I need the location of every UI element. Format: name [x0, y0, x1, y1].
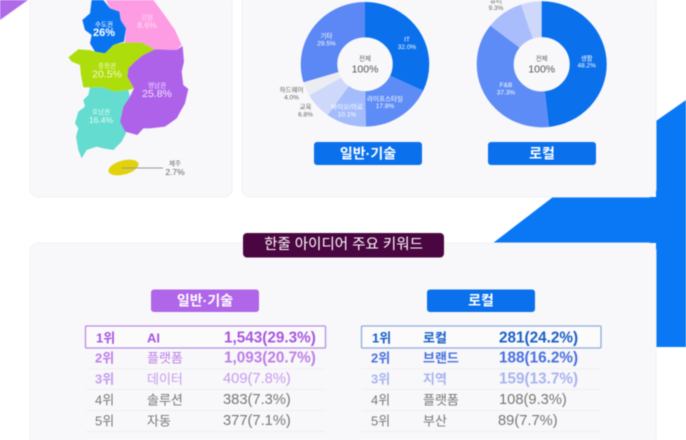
label: other 29.5%: 29.5%: [317, 40, 336, 48]
label: Capital area 26%: 수도권: [95, 20, 113, 28]
label: Honam 16.4%: 16.4%: [89, 115, 113, 125]
label: Honam 16.4%: 호남권: [92, 107, 110, 116]
row: rank 4 platform: [371, 392, 567, 408]
row: rank 2 brand: [371, 350, 578, 366]
row: rank 2 platform: [95, 350, 316, 366]
row: rank 5 automation: 377(7.1%): [223, 413, 291, 429]
row: rank 1 AI: [96, 330, 316, 346]
label: Chungcheong 20.5%: [92, 61, 122, 80]
table: local keywords: [362, 290, 601, 432]
row: rank 4 solution: [95, 392, 291, 408]
button: general and technology: [314, 142, 422, 165]
donut center: total 100%: 100%: [352, 64, 378, 76]
label: Gangwon 8.6%: [137, 12, 157, 30]
label: IT 32.0%: IT: [404, 36, 410, 44]
label: hardware 4.0%: 4.0%: [284, 94, 299, 102]
table: general and technology keywords: [86, 290, 326, 432]
label: Yeongnam 25.8%: 영남권: [148, 80, 166, 90]
donut center: total 100%: [352, 54, 378, 76]
label: Yeongnam 25.8%: 25.8%: [142, 88, 172, 100]
row: rank 1 AI: 1,543(29.3%): [224, 330, 316, 346]
map: regions of Korea: [68, 0, 188, 178]
title: main keywords of one-line ideas: [243, 233, 444, 258]
panel: regional map: [30, 0, 232, 197]
label: other 29.5%: [317, 31, 336, 48]
label: living 48.2%: 생활: [581, 54, 593, 62]
label: living 48.2%: [577, 54, 596, 70]
donut center: total 100%: 100%: [528, 64, 555, 76]
row: rank 5 automation: 5위: [95, 414, 114, 428]
label: Honam 16.4%: [89, 107, 113, 125]
rank 1 highlight box: [86, 326, 326, 348]
label: education 6.8%: 6.8%: [298, 112, 313, 118]
label: living 48.2%: 48.2%: [577, 62, 596, 70]
region: Gangwon: [106, 0, 182, 50]
label: lifestyle 17.8%: 17.8%: [376, 103, 394, 110]
label: beauty 9.3%: 9.3%: [489, 5, 504, 12]
label: F&B 37.3%: F&B: [500, 82, 512, 89]
button: local: [488, 142, 596, 165]
row: rank 3 region: 지역: [423, 372, 447, 386]
donut center: total 100%: 전체: [536, 54, 548, 62]
label: IT 32.0%: 32.0%: [398, 44, 416, 51]
row: rank 5 Busan: 5위: [371, 414, 390, 428]
row: rank 1 local: 로컬: [423, 330, 447, 346]
label: hardware 4.0%: 하드웨어: [280, 85, 303, 94]
label: Gangwon 8.6%: 8.6%: [137, 20, 157, 30]
row: rank 3 region: [371, 370, 578, 388]
label: Jeju 2.7%: 제주: [169, 160, 181, 168]
region: Yeongnam: [120, 46, 188, 135]
panel: keyword rankings: [30, 243, 656, 440]
row: rank 1 AI: 1위: [96, 330, 115, 346]
region: Honam: [75, 87, 130, 158]
title: main keywords of one-line ideas: 한줄 아이디어 주요 키워드: [264, 236, 423, 253]
label: other 29.5%: 기타: [321, 31, 332, 40]
label: Jeju 2.7%: [165, 160, 185, 177]
label: Chungcheong 20.5%: 충청권: [98, 61, 116, 70]
row: rank 2 brand: 188(16.2%): [499, 350, 578, 366]
row: rank 3 data: 409(7.8%): [223, 371, 291, 387]
row: rank 4 platform: 4위: [371, 392, 390, 408]
label: bio and medical 10.1%: [331, 102, 363, 118]
label: education 6.8%: 교육: [300, 103, 311, 111]
leader line: Jeju: [122, 167, 163, 169]
label: beauty 9.3%: [489, 0, 504, 12]
row: rank 5 automation: 자동: [147, 414, 171, 428]
label: Jeju 2.7%: 2.7%: [165, 167, 185, 177]
row: rank 2 platform: 플랫폼: [147, 350, 183, 366]
row: rank 5 Busan: 부산: [423, 414, 447, 428]
label: Gangwon 8.6%: 강원: [141, 12, 153, 22]
row: rank 1 local: [372, 330, 578, 346]
row: rank 3 region: 159(13.7%): [499, 370, 578, 388]
button: general and technology: 일반·기술: [177, 292, 233, 308]
row: rank 2 brand: 브랜드: [423, 350, 459, 366]
button: general and technology: [151, 290, 259, 312]
label: Capital area 26%: [93, 20, 115, 39]
row: rank 2 brand: 2위: [371, 350, 390, 366]
row: rank 5 Busan: 89(7.7%): [498, 413, 558, 429]
label: Yeongnam 25.8%: [142, 80, 172, 100]
row: rank 5 automation: [95, 413, 291, 429]
row: rank 3 data: 데이터: [147, 372, 183, 386]
row: rank 3 region: 3위: [371, 372, 390, 386]
button: local: 로컬: [529, 146, 555, 162]
rank 1 highlight box: [362, 326, 601, 348]
label: F&B 37.3%: 37.3%: [497, 90, 515, 96]
row: rank 1 AI: AI: [147, 330, 160, 346]
row: rank 4 platform: 플랫폼: [423, 392, 459, 408]
region: Capital area: [82, 0, 126, 53]
row: rank 3 data: [95, 371, 291, 387]
row: rank 4 platform: 108(9.3%): [499, 392, 567, 408]
row: rank 2 platform: 1,093(20.7%): [224, 350, 316, 366]
donut center: total 100%: [528, 54, 555, 76]
decorative blue background band: [493, 100, 686, 347]
row: rank 4 solution: 솔루션: [147, 392, 183, 408]
button: local: 로컬: [468, 292, 494, 308]
button: local: [427, 290, 535, 312]
row: rank 5 Busan: [371, 413, 558, 429]
label: bio and medical 10.1%: 바이오/의료: [331, 102, 363, 111]
label: IT 32.0%: [398, 36, 416, 51]
button: general and technology: 일반·기술: [340, 146, 396, 162]
label: F&B 37.3%: [497, 82, 515, 96]
donut chart: general and technology: [319, 20, 411, 109]
row: rank 4 solution: 4위: [95, 392, 114, 408]
row: rank 1 local: 281(24.2%): [499, 330, 578, 346]
row: rank 1 local: 1위: [372, 330, 391, 346]
label: Chungcheong 20.5%: 20.5%: [92, 68, 122, 80]
label: lifestyle 17.8%: [367, 94, 403, 110]
label: education 6.8%: [298, 103, 313, 118]
label: hardware 4.0%: [280, 85, 303, 102]
row: rank 2 platform: 2위: [95, 350, 114, 366]
label: Capital area 26%: 26%: [93, 27, 115, 39]
label: bio and medical 10.1%: 10.1%: [338, 112, 356, 118]
region: Jeju: [107, 157, 140, 178]
decorative purple corner triangle: [0, 0, 28, 20]
row: rank 4 solution: 383(7.3%): [223, 392, 291, 408]
region: Chungcheong: [68, 43, 155, 92]
donut chart: local: [495, 19, 588, 109]
donut center: total 100%: 전체: [359, 54, 371, 62]
label: lifestyle 17.8%: 라이프스타일: [367, 94, 403, 103]
panel: donut charts: [242, 0, 656, 197]
row: rank 3 data: 3위: [95, 372, 114, 386]
